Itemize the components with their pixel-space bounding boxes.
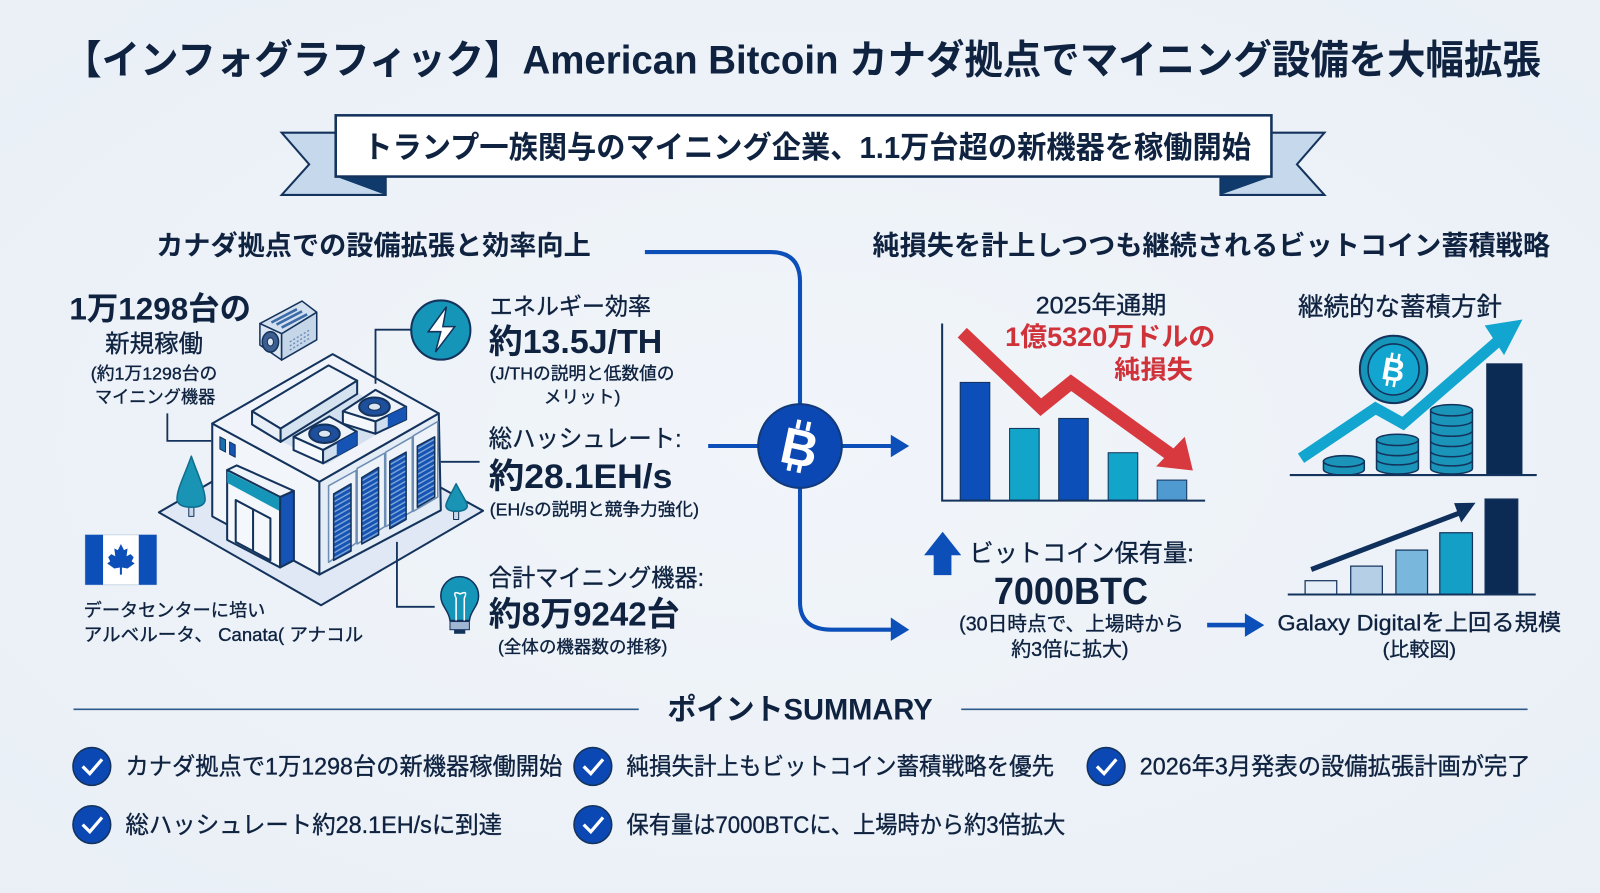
summary item 5 [574,806,1065,844]
comparison caption [1278,611,1561,661]
roof fan unit back [343,390,406,434]
stat: energy efficiency: メリット) [544,387,620,407]
roof box [252,365,357,442]
summary item 1 [73,748,562,785]
icon: central bitcoin [758,404,842,488]
loss bar chart [942,324,1205,501]
summary item 4 [73,806,502,844]
right wall [319,413,441,575]
stat: new units [69,290,251,407]
summary item 2 [574,748,1054,785]
stat: total machines: (全体の機器数の推移) [498,637,667,657]
stat: energy efficiency: 約13.5J/TH [489,323,662,361]
bitcoin coin [1360,336,1427,403]
stat: energy efficiency: エネルギー効率 [490,293,651,319]
tree left [177,456,205,516]
loss caption: 2025年通期 [1036,291,1166,319]
stat: total machines [489,565,704,657]
location caption [84,599,363,645]
arrow to comparison [1207,613,1264,637]
leader lines [167,330,480,607]
stat: new units: (約1万1298台の [91,364,217,384]
stat: bitcoin holdings [959,539,1194,661]
stat: bitcoin holdings: ビットコイン保有量: [969,539,1194,567]
stat: bitcoin holdings: 7000BTC [994,570,1148,612]
title: 【インフォグラフィック】American Bitcoin カナダ拠点でマイニング設備を大幅拡張 [63,38,1541,82]
location caption: アルベルータ、 Canata( アナコル [84,624,363,645]
loss caption: 1億5320万ドルの [1005,322,1215,352]
icon: mining unit [260,301,317,360]
holdings up arrow [924,532,961,575]
wall windows [329,421,438,562]
navy rising arrow [1311,503,1476,569]
icon: lightning [411,300,470,360]
stat: hash rate: 総ハッシュレート: [489,425,682,453]
icon: canada flag [85,535,157,585]
summary item 1: カナダ拠点で1万1298台の新機器稼働開始 [126,754,562,781]
coin stacks [1323,405,1472,475]
isometric data center [159,354,483,605]
summary item 4: 総ハッシュレート約28.1EH/sに到達 [126,812,502,839]
ribbon banner [282,115,1324,195]
stat: total machines: 約8万9242台 [489,596,680,634]
comparison caption: Galaxy Digitalを上回る規模 [1278,611,1561,636]
stat: new units: 新規稼働 [105,330,203,358]
stat: hash rate: 約28.1EH/s [489,457,672,496]
icon: light bulb [441,577,479,634]
bitcoin coin: B [1379,350,1408,389]
right heading: 純損失を計上しつつも継続されるビットコイン蓄積戦略 [872,231,1550,261]
accumulation chart [1290,319,1537,475]
flow connector arrows [645,252,909,641]
ground platform [159,420,483,605]
summary item 5: 保有量は7000BTCに、上場時から約3倍拡大 [627,812,1065,839]
stat: hash rate: (EH/sの説明と競争力強化) [490,499,699,519]
stat: bitcoin holdings: 約3倍に拡大) [1011,639,1129,661]
stat: bitcoin holdings: (30日時点で、上場時から [959,614,1184,636]
left heading: カナダ拠点での設備拡張と効率向上 [156,230,591,261]
roof fan unit front [294,416,357,463]
stat: energy efficiency [489,293,674,407]
loss caption [1005,291,1215,385]
bars [960,382,1187,500]
teal rising arrow [1301,319,1522,458]
location caption: データセンターに培い [84,599,265,620]
stat: new units: 1万1298台の [69,290,251,326]
comparison bar chart [1288,499,1536,594]
banner text: トランプ一族関与のマイニング企業、1.1万台超の新機器を稼働開始 [363,131,1251,165]
tree right [446,484,467,519]
stat: total machines: 合計マイニング機器: [489,565,704,592]
roof shadow [281,393,403,464]
accumulation heading: 継続的な蓄積方針 [1298,293,1502,321]
small windows [220,437,235,457]
summary item 3: 2026年3月発表の設備拡張計画が完了 [1140,754,1531,781]
summary item 2: 純損失計上もビットコイン蓄積戦略を優先 [627,754,1054,781]
roof [212,354,439,482]
stat: hash rate [489,425,699,519]
stat: new units: マイニング機器 [95,387,215,407]
comparison caption: (比較図) [1383,639,1456,661]
stat: energy efficiency: (J/THの説明と低数値の [490,364,674,384]
loss caption: 純損失 [1114,357,1193,385]
entrance [227,465,294,567]
red down arrow [962,333,1193,470]
icon: central bitcoin: B [776,416,824,480]
summary item 3 [1087,748,1531,785]
left wall [212,424,319,575]
summary heading: ポイントSUMMARY [667,694,933,727]
